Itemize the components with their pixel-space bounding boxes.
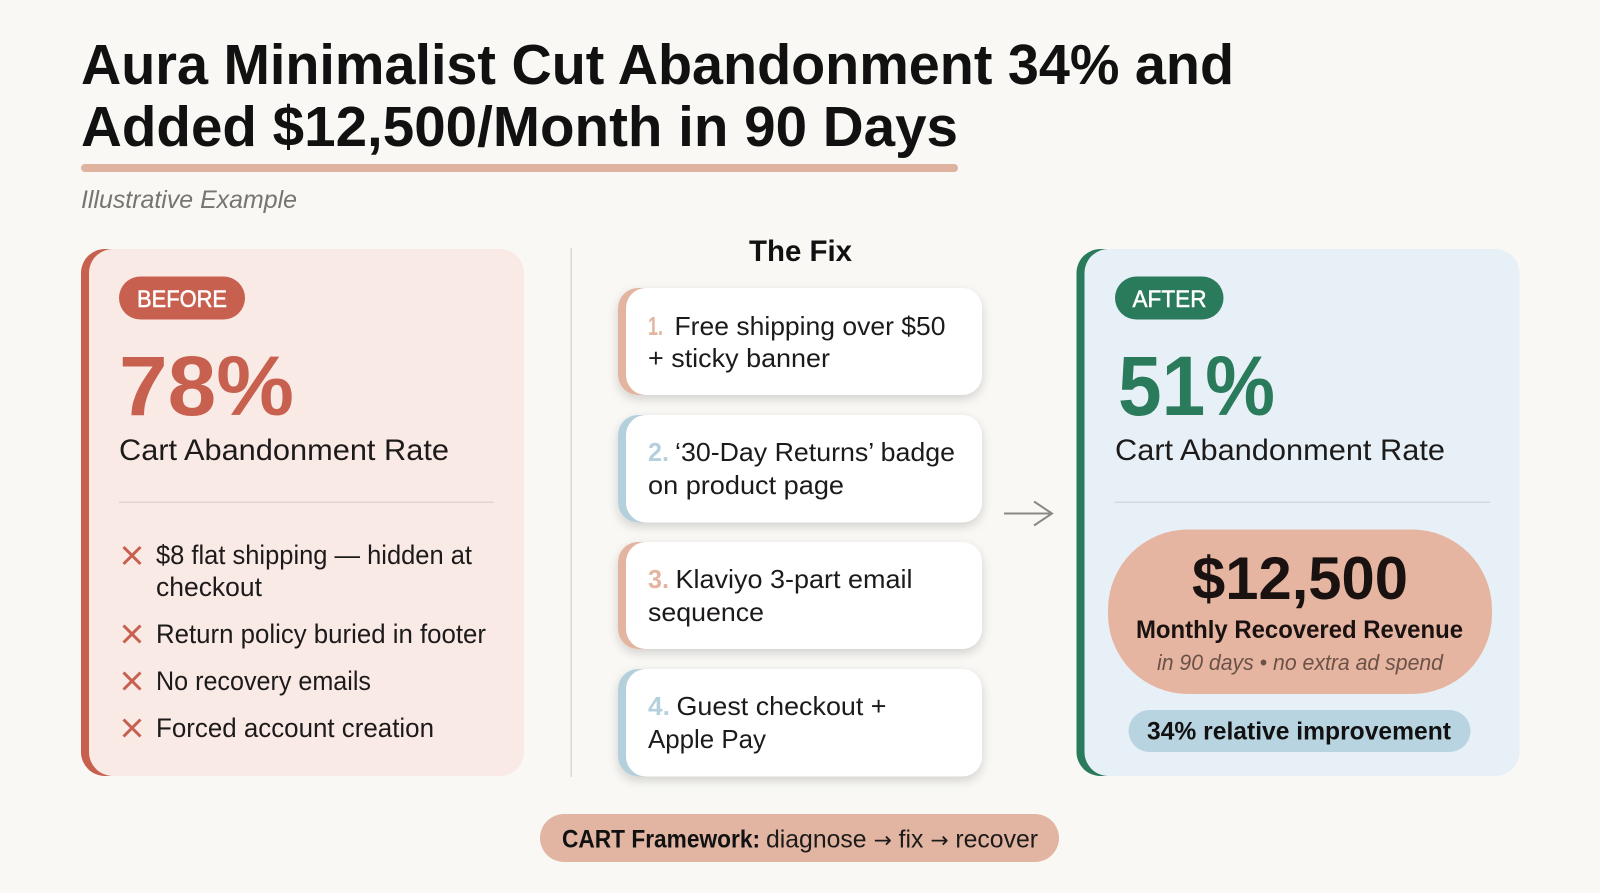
fix card 2: ‘30-Day Returns’ badge <box>675 437 955 467</box>
problem: shipping: $8 flat shipping — hidden at <box>156 540 472 570</box>
title: Aura Minimalist Cut Abandonment 34% and <box>81 33 1234 97</box>
after metric label: Cart Abandonment Rate <box>1115 434 1445 467</box>
improvement pill: 34% relative improvement <box>1147 718 1452 746</box>
footer framework pill: CART Framework: <box>562 826 760 854</box>
after badge: AFTER <box>1132 286 1206 313</box>
problem: shipping <box>124 540 472 602</box>
footer framework pill: diagnose → fix → recover <box>766 826 1038 854</box>
title underline <box>81 164 958 172</box>
revenue callout: $12,500 <box>1192 545 1408 612</box>
fix card 3 <box>618 542 982 649</box>
revenue callout: Monthly Recovered Revenue <box>1136 616 1463 644</box>
problem list <box>124 540 486 743</box>
heading: the fix: The Fix <box>749 235 852 268</box>
fix card 3: 3. <box>648 564 669 594</box>
fix card 1: Free shipping over $50 <box>674 311 946 341</box>
title <box>81 33 1234 159</box>
fix card 4: Guest checkout + <box>676 691 886 721</box>
problem: account: Forced account creation <box>156 713 434 743</box>
fix card 3: Klaviyo 3-part email <box>676 564 912 594</box>
before metric: 78% <box>119 339 294 433</box>
subtitle: Illustrative Example <box>81 186 297 214</box>
problem: returns: Return policy buried in footer <box>156 619 486 649</box>
fix card 1: + sticky banner <box>648 343 830 373</box>
problem: shipping: checkout <box>156 572 262 602</box>
fix card 3: sequence <box>648 597 764 627</box>
fix card 4 <box>618 669 982 776</box>
before metric label: Cart Abandonment Rate <box>119 434 449 467</box>
fix card 2: on product page <box>648 470 844 500</box>
fix card 1 <box>618 288 982 395</box>
fix card 4: 4. <box>648 691 670 721</box>
arrow: fix to after <box>1004 502 1052 526</box>
fix card 2: 2. <box>648 437 669 467</box>
after badge <box>1115 276 1224 320</box>
before badge: BEFORE <box>137 286 227 313</box>
fix card 2 <box>618 415 982 522</box>
panel: before <box>81 249 524 776</box>
fix card 4: Apple Pay <box>648 724 766 754</box>
problem: emails: No recovery emails <box>156 666 371 696</box>
panel: after <box>1076 249 1520 776</box>
improvement pill <box>1128 710 1470 752</box>
revenue callout <box>1108 530 1492 694</box>
title: Added $12,500/Month in 90 Days <box>81 95 958 159</box>
fix card 1: 1. <box>648 311 663 341</box>
revenue callout: in 90 days • no extra ad spend <box>1157 650 1444 675</box>
before badge <box>119 276 245 320</box>
footer framework pill <box>540 814 1059 862</box>
after metric: 51% <box>1118 339 1275 433</box>
